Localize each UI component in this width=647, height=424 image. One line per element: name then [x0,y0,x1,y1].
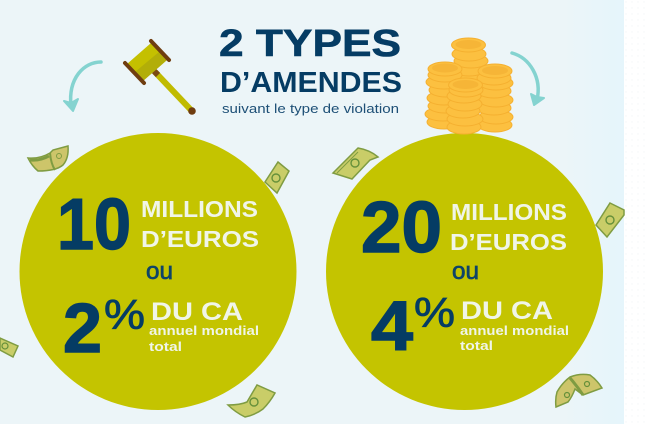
millions d'euros: MILLIONS [141,196,258,222]
title: 2 TYPES [219,23,401,65]
right olive circle [326,133,603,410]
front stack [446,78,483,134]
millions d'euros [141,196,259,252]
title [219,23,402,99]
ou: ou [452,258,479,285]
icon: banknote top of right circle [333,148,378,179]
left olive circle [20,133,296,410]
arrow: left curved teal [64,62,101,111]
2 percent [63,289,145,367]
number 20: 20 [361,188,442,268]
icon: banknote top left [28,146,68,171]
left stack [425,62,463,129]
icon: banknote right of right circle [596,203,624,237]
4 percent: 4 [371,287,413,365]
du CA: annuel mondial [460,323,569,338]
subtitle: suivant le type de violation [222,101,399,116]
du CA [149,298,259,354]
number 10: 10 [57,185,131,265]
millions d'euros: D’EUROS [141,226,259,252]
du CA: total [149,339,182,354]
icon: gavel [125,41,196,115]
right stack [477,64,513,132]
icon: banknote behind left circle [265,162,289,193]
du CA: DU CA [461,297,553,325]
icon: coin stacks [425,38,513,134]
2 percent: % [104,291,145,338]
du CA: total [460,338,493,353]
du CA: annuel mondial [149,323,259,338]
top back stack [452,38,489,92]
icon: banknote bottom left [228,385,275,417]
2 percent: 2 [63,289,102,367]
du CA: DU CA [151,298,243,326]
arrow: right curved teal [512,53,544,105]
4 percent [371,287,455,365]
ou: ou [146,258,173,285]
millions d'euros: D’EUROS [450,229,567,255]
title: D’AMENDES [220,67,402,99]
panel: left amount text [57,185,259,367]
icon: banknote bottom right [556,374,602,407]
icon: banknote left edge [0,338,18,357]
panel: right amount text [361,188,569,365]
du CA [460,297,569,353]
millions d'euros: MILLIONS [451,199,567,225]
4 percent: % [414,289,455,336]
millions d'euros [450,199,567,255]
